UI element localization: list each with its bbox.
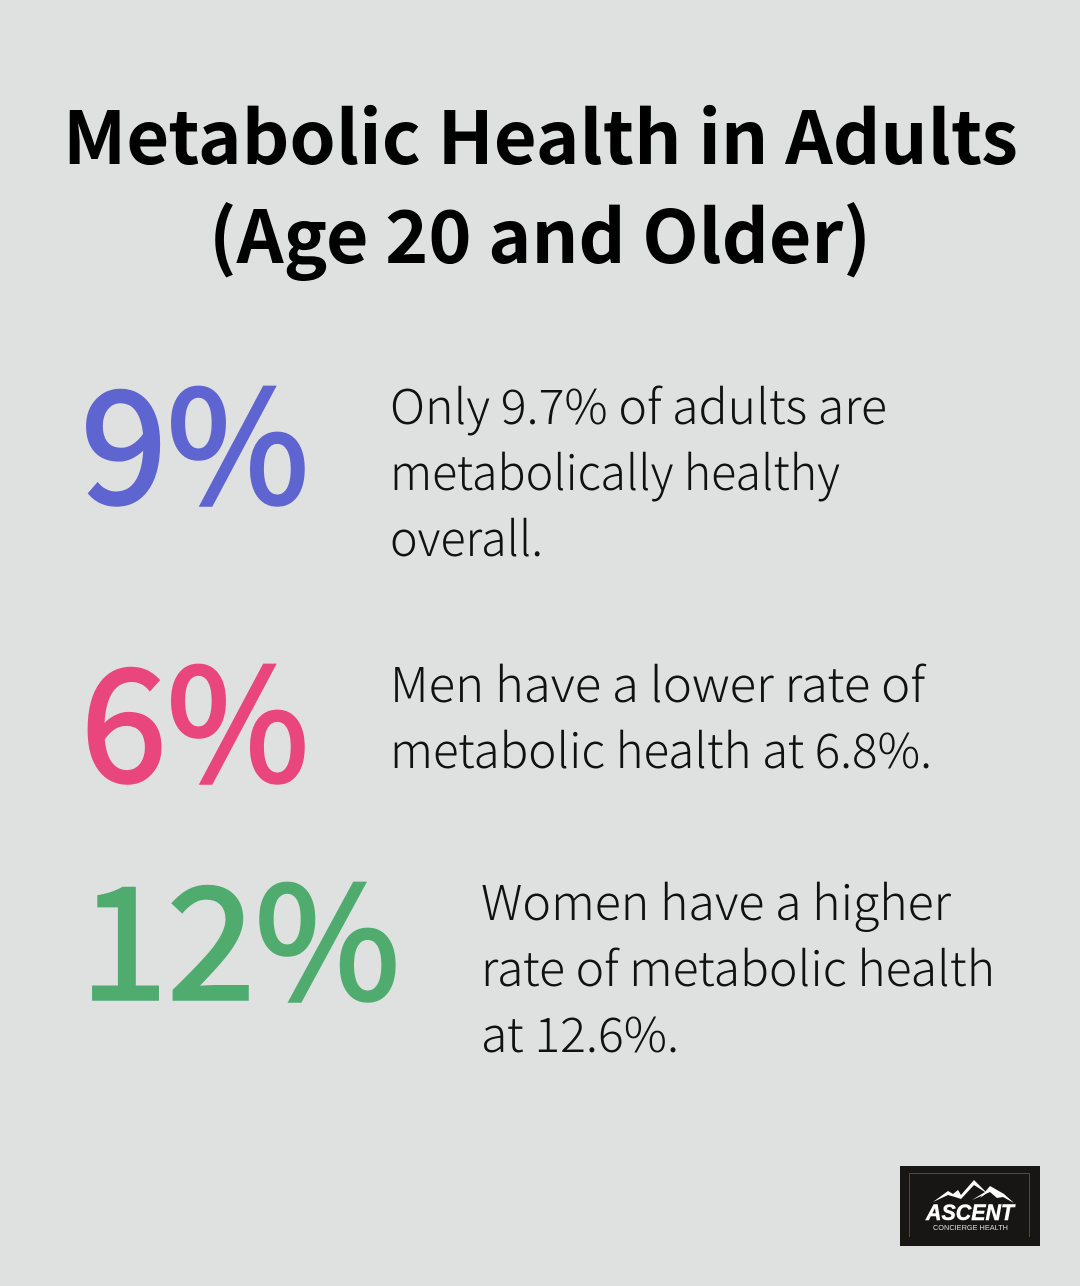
text: women rate: rate of metabolic health (481, 930, 995, 1000)
title (63, 80, 1018, 285)
text: women rate (481, 864, 995, 1066)
text: men rate: metabolic health at 6.8%. (390, 712, 932, 782)
stat: 9% overall (81, 323, 887, 570)
text: overall rate: overall. (390, 500, 543, 570)
title: Metabolic Health in Adults (63, 80, 1018, 186)
text: women rate: Women have a higher (481, 864, 952, 934)
logo subtitle: CONCIERGE HEALTH (933, 1223, 1008, 1232)
stat: 6% men (81, 601, 932, 826)
text: women rate: at 12.6%. (481, 996, 679, 1066)
stat: 12% women (80, 819, 995, 1066)
text: men rate (390, 646, 932, 782)
number: 9%: 9% (81, 323, 309, 548)
title: (Age 20 and Older) (209, 179, 871, 285)
number: 6%: 6% (81, 601, 309, 826)
text: overall rate: Only 9.7% of adults are (390, 368, 887, 438)
icon: mountains (933, 1180, 1014, 1203)
text: overall rate (390, 368, 887, 570)
text: men rate: Men have a lower rate of (390, 646, 927, 716)
logo: Ascent Concierge Health (900, 1166, 1040, 1246)
logo wordmark: ASCENT (925, 1200, 1016, 1225)
number: 12%: 12% (80, 819, 400, 1044)
text: overall rate: metabolically healthy (390, 434, 840, 504)
